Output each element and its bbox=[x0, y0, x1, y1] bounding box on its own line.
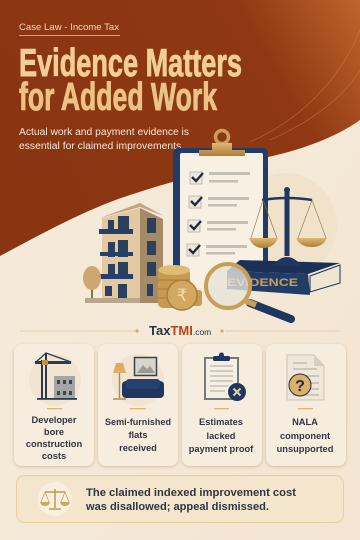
icon: clipboard with cross bbox=[205, 352, 246, 401]
subtitle bbox=[19, 127, 189, 152]
illustration: coins bbox=[158, 265, 202, 310]
illustration: coins: ₹ bbox=[177, 286, 187, 306]
checklist rows bbox=[206, 172, 250, 254]
brand logo: TaxTMI.com bbox=[149, 323, 211, 338]
illustration: book EVIDENCE: EVIDENCE bbox=[227, 277, 298, 289]
card text: NALA bbox=[292, 417, 318, 427]
panel: estimates bbox=[182, 344, 262, 466]
icon: crane and building bbox=[29, 353, 81, 406]
card text: Estimates bbox=[199, 417, 243, 427]
title: for Added Work bbox=[19, 76, 217, 119]
card text: bore bbox=[44, 427, 64, 437]
card text: component bbox=[280, 431, 330, 441]
title bbox=[19, 42, 242, 119]
panel: NALA bbox=[266, 344, 346, 466]
panel: developer costs bbox=[14, 344, 94, 466]
icon: document with question mark: ? bbox=[295, 378, 305, 395]
callout text bbox=[85, 487, 296, 513]
illustration: magnifying glass bbox=[206, 264, 291, 319]
card text bbox=[189, 417, 254, 454]
card text bbox=[277, 417, 334, 454]
illustration: book EVIDENCE bbox=[227, 260, 340, 295]
eyebrow label: Case Law - Income Tax bbox=[19, 22, 119, 33]
card text: construction bbox=[26, 439, 82, 449]
illustration: building bbox=[99, 203, 164, 303]
subtitle: essential for claimed improvements. bbox=[19, 141, 184, 152]
illustration: scales bbox=[249, 187, 327, 266]
card text bbox=[105, 417, 171, 453]
illustration: clipboard bbox=[173, 130, 268, 288]
card text: unsupported bbox=[277, 444, 334, 454]
illustration: tree bbox=[83, 266, 140, 303]
subtitle: Actual work and payment evidence is bbox=[19, 127, 189, 138]
card text: received bbox=[119, 443, 157, 453]
icon: sofa and lamp bbox=[112, 354, 164, 406]
card text: Developer bbox=[32, 415, 77, 425]
card text: payment proof bbox=[189, 444, 254, 454]
card text bbox=[26, 415, 82, 461]
title: Evidence Matters bbox=[19, 42, 242, 85]
panel: semi-furnished flats bbox=[98, 344, 178, 466]
callout text: The claimed indexed improvement cost bbox=[86, 487, 296, 499]
card text: lacked bbox=[207, 431, 236, 441]
glow behind illustration bbox=[233, 173, 337, 277]
brand logo bbox=[20, 323, 340, 338]
callout text: was disallowed; appeal dismissed. bbox=[85, 501, 269, 513]
card text: flats bbox=[128, 430, 148, 440]
card text: costs bbox=[42, 451, 66, 461]
icon: scales bbox=[38, 482, 72, 516]
callout: outcome bbox=[16, 476, 344, 522]
rust header shape bbox=[0, 0, 360, 256]
card text: Semi-furnished bbox=[105, 417, 171, 427]
